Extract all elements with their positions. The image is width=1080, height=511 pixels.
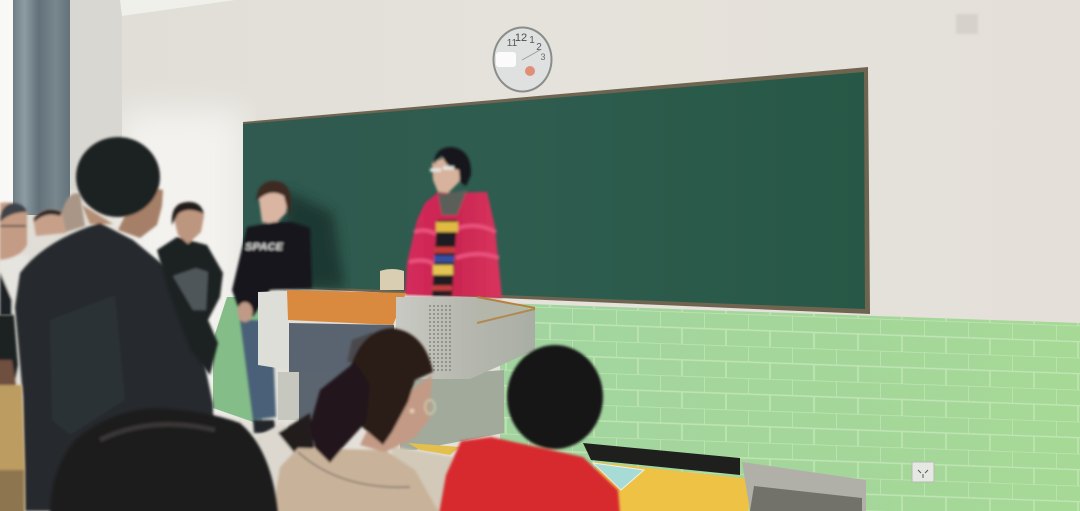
clock [492,26,552,92]
window [0,0,14,215]
lectern [258,290,535,450]
clock: 3 [540,52,546,62]
clock: 1 [529,35,535,46]
earring [410,408,414,414]
clock: 11 [507,38,518,49]
teacher in pink jacket [405,147,502,298]
clock: 2 [536,42,542,53]
ponytail [310,362,370,463]
hair [348,328,433,445]
standing student with printed sweatshirt [232,181,312,433]
side wall [70,0,122,190]
lectern speaker grille [427,303,453,373]
lectern orange top [287,290,406,325]
glasses [425,400,435,414]
bright wall patch beside the board [120,110,244,420]
yellow desk [595,462,760,511]
lectern lower column [278,372,299,420]
socket [912,462,934,482]
cup on lectern [380,269,404,290]
other head behind [347,332,380,362]
student with ponytail [256,328,453,511]
white sweater left [256,423,300,511]
grey box under desk [742,462,866,511]
lectern left panel [258,291,289,370]
lectern stem [400,370,504,450]
shadow of student on board [285,190,345,288]
curtain [13,0,70,215]
student in red jacket, back view [439,345,620,511]
foreground student's head [50,408,278,511]
ceiling fixture [120,0,235,16]
lectern slanted panel [477,298,535,323]
far-left standing students [0,193,85,320]
clock: 12 [515,32,527,44]
lectern right box [396,297,535,379]
student in black hoodie, back view [15,137,213,511]
wall plate [956,14,978,34]
book on desk [593,463,644,490]
left-edge seated student [0,315,25,511]
dark desk edge [583,443,740,475]
blackboard [243,67,870,314]
standing student with printed sweatshirt: SPACE [245,242,283,253]
white sweater right [390,446,453,511]
dark hair of neighbour [278,413,314,455]
face and neck [360,375,432,452]
tan top [272,448,440,511]
green brick wall [213,297,1080,511]
standing student in black sweatshirt, mid left [157,202,223,375]
lectern blue panel [289,323,394,372]
